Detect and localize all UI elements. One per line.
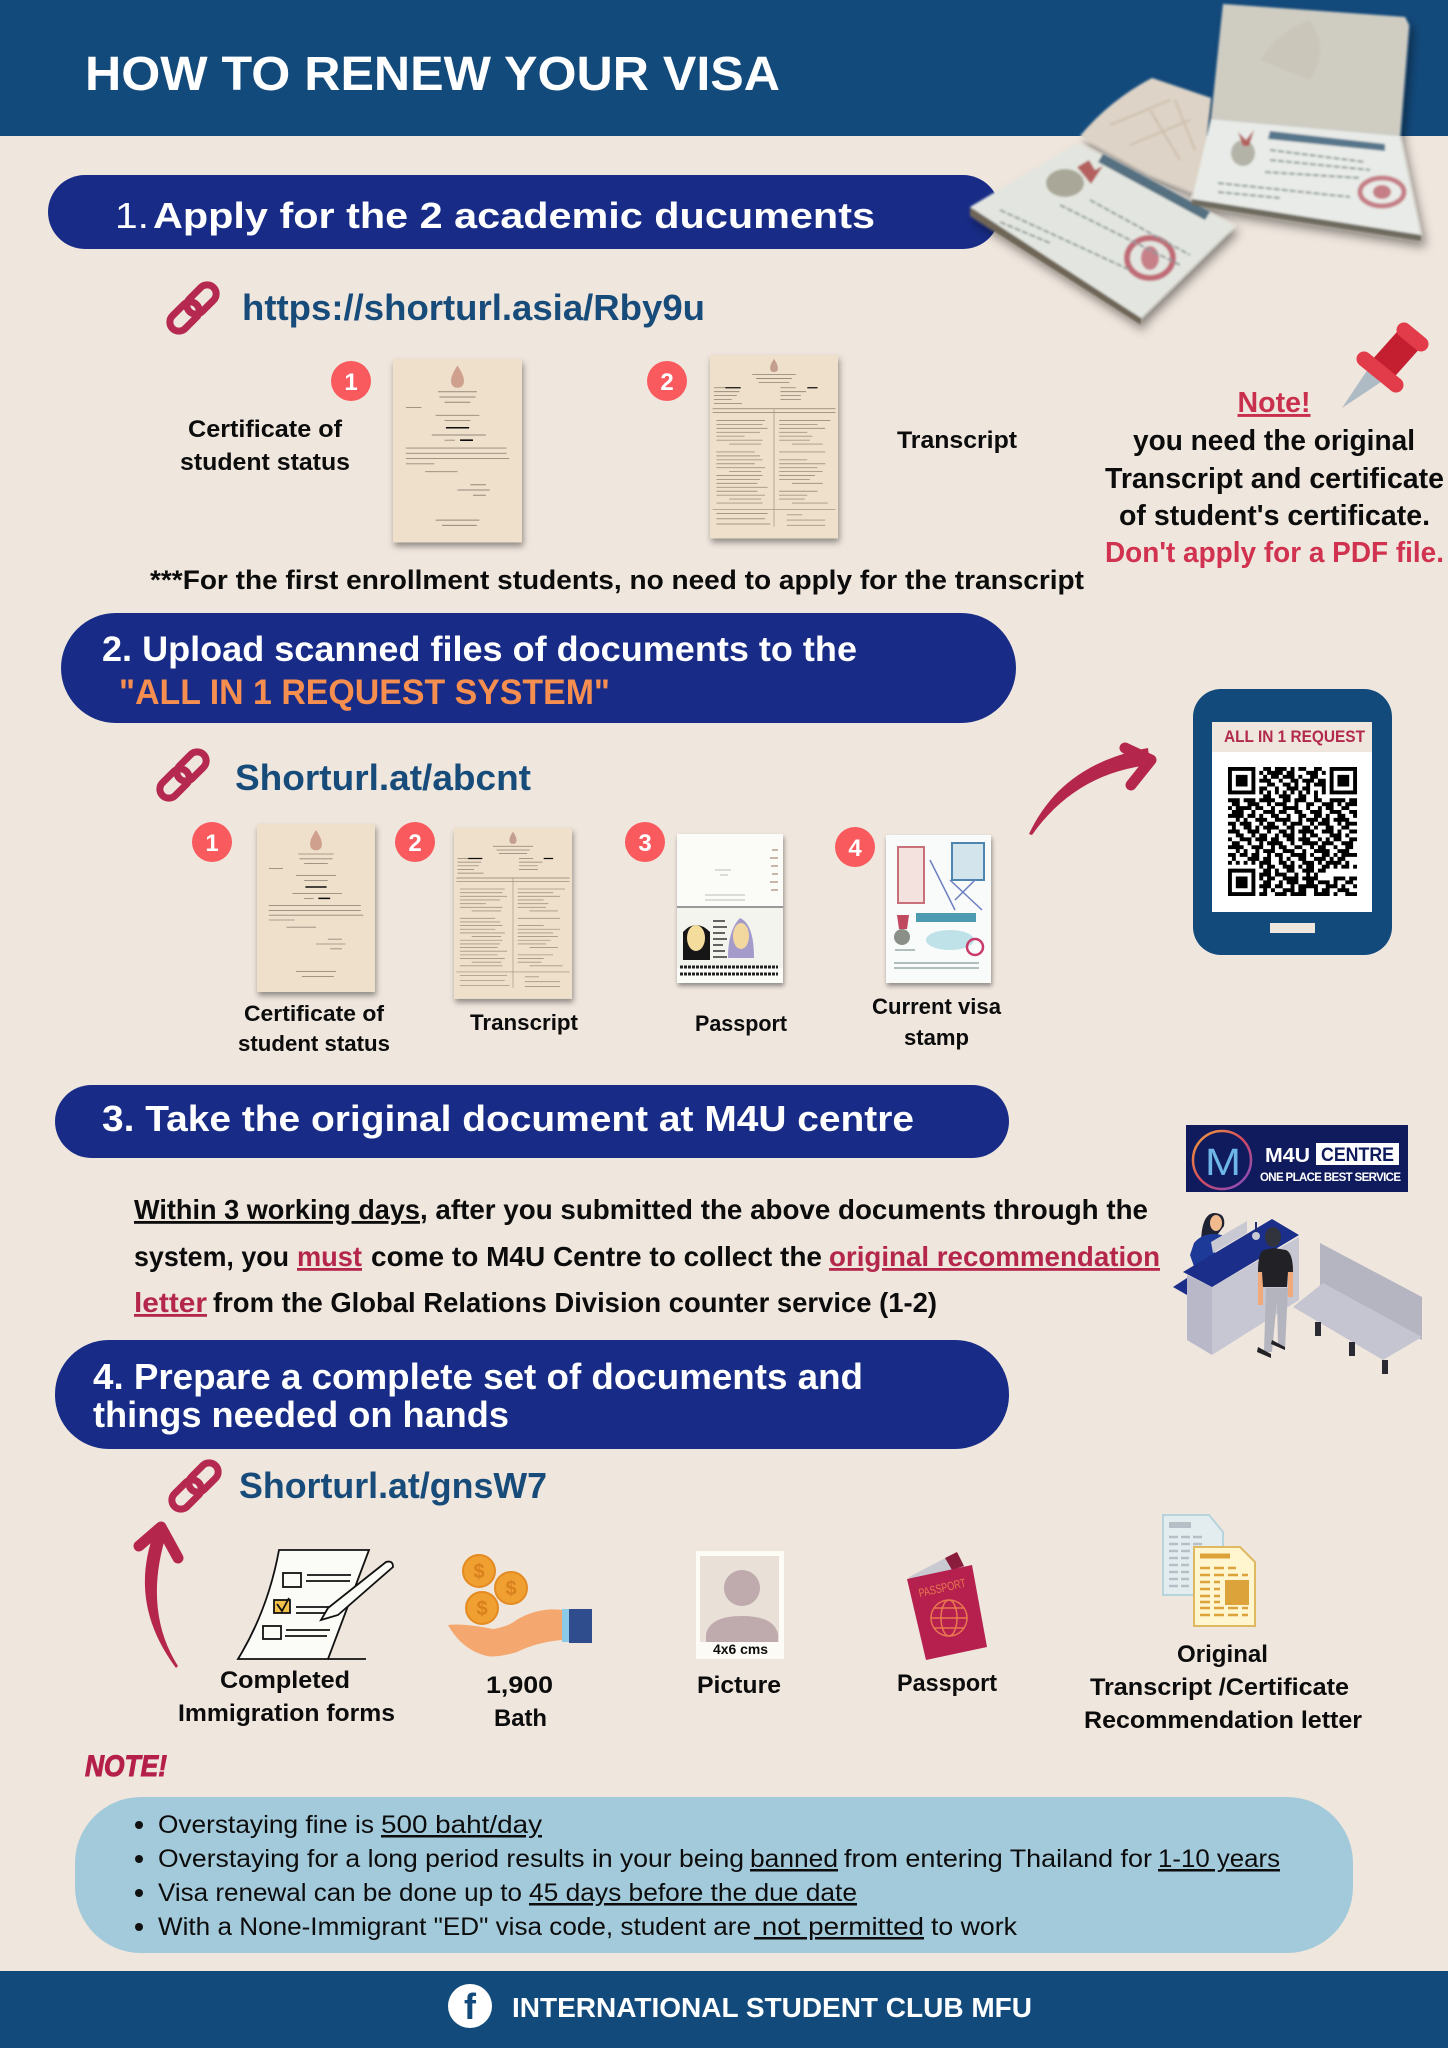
step 2 heading: 2. Upload scanned files of documents to the (102, 630, 857, 669)
illustration: service counter (1173, 1213, 1422, 1374)
icon: money in hand: $ (473, 1561, 485, 1583)
link 3 (168, 1459, 547, 1513)
receptionist (1190, 1213, 1224, 1275)
note callout: Note! (1238, 387, 1310, 419)
note callout (1105, 387, 1444, 569)
label: picture: Picture (697, 1672, 781, 1699)
step 4 heading (55, 1340, 1009, 1449)
QR code (1228, 767, 1357, 896)
footer (0, 1971, 1448, 2048)
badge 4 (835, 827, 875, 867)
badge 1: 1 (344, 369, 358, 396)
label: certificate of student status: student status (238, 1031, 390, 1056)
footer: INTERNATIONAL STUDENT CLUB MFU (512, 1992, 1032, 2023)
link 2: Shorturl.at/abcnt (235, 757, 531, 798)
step 3 paragraph: from the Global Relations Division counter service (1-2) (213, 1287, 937, 1318)
note callout: Transcript and certificate (1105, 463, 1444, 495)
label: current visa stamp: stamp (904, 1025, 969, 1050)
customer (1257, 1227, 1293, 1358)
bullet list: 45 days before the due date (529, 1879, 857, 1907)
M4U centre logo: M4U (1265, 1145, 1310, 1167)
note callout: you need the original (1133, 425, 1415, 457)
bullet list: from entering Thailand for (844, 1845, 1152, 1873)
step 3 paragraph: must (297, 1241, 362, 1272)
icon: chain link (156, 748, 210, 802)
bullet list: Overstaying for a long period results in your being (158, 1845, 744, 1873)
step 3 paragraph: system, you (134, 1241, 289, 1272)
label: certificate of student status (180, 416, 350, 476)
icon: documents (1163, 1515, 1255, 1626)
icon: money in hand: $ (476, 1598, 488, 1620)
label: original documents: Recommendation letter (1084, 1707, 1362, 1734)
note callout: of student's certificate. (1119, 500, 1430, 532)
document: certificate (257, 824, 375, 992)
badge 4: 4 (848, 835, 862, 862)
step 3 paragraph: come to M4U Centre to collect the (371, 1241, 822, 1272)
step 2 heading (61, 613, 1016, 723)
step 1 heading (48, 175, 1000, 249)
bullet list: 1-10 years (1158, 1845, 1280, 1873)
badge 2: 2 (660, 369, 674, 396)
title: HOW TO RENEW YOUR VISA (85, 48, 780, 101)
step 3 heading: 3. Take the original document at M4U centre (102, 1098, 914, 1139)
step 3 paragraph: letter (134, 1287, 207, 1318)
label: certificate of student status: student status (180, 449, 350, 476)
document: current visa stamp (886, 835, 991, 983)
label: passport: Passport (897, 1670, 997, 1697)
tablet with QR code: ALL IN 1 REQUEST (1224, 728, 1365, 746)
arrow to QR (1029, 748, 1151, 835)
badge 1 (331, 361, 371, 401)
M4U centre logo (1186, 1125, 1408, 1192)
bullet list: not permitted (754, 1913, 924, 1941)
photo: open passports (970, 4, 1421, 325)
label: original documents: Transcript /Certificate (1090, 1674, 1349, 1701)
M4U centre logo: CENTRE (1321, 1145, 1394, 1166)
badge 3 (625, 822, 665, 862)
badge 2 (647, 361, 687, 401)
badge 3: 3 (638, 830, 652, 857)
step 4 heading: 4. Prepare a complete set of documents and (93, 1356, 863, 1397)
label: 1,900 bath: Bath (494, 1705, 547, 1732)
label: 1,900 bath: 1,900 (486, 1672, 553, 1699)
label: certificate of student status: Certificate of (244, 1001, 385, 1026)
M4U centre logo: M (1205, 1142, 1241, 1184)
document: transcript (454, 828, 572, 999)
link 2 (156, 748, 531, 802)
icon: money in hand (448, 1555, 592, 1656)
bullet list: to work (931, 1913, 1018, 1941)
bench (1293, 1243, 1422, 1374)
step 1 heading: Apply for the 2 academic ducuments (153, 195, 875, 236)
step 3 paragraph: , after you submitted the above documents through the (420, 1194, 1148, 1225)
document: passport (677, 834, 783, 983)
label: certificate of student status (238, 1001, 390, 1056)
badge 1: 1 (205, 830, 219, 857)
label: 1,900 bath (486, 1672, 553, 1732)
badge 2: 2 (408, 830, 422, 857)
icon: immigration form (238, 1550, 393, 1659)
step 1 heading: 1. (115, 195, 149, 236)
step 2 heading: "ALL IN 1 REQUEST SYSTEM" (119, 673, 610, 712)
document: transcript (710, 355, 838, 538)
label: completed immigration forms: Completed (220, 1667, 350, 1694)
note heading: NOTE! (85, 1750, 167, 1783)
label: completed immigration forms: Immigration forms (178, 1700, 395, 1727)
note callout: Don't apply for a PDF file. (1105, 537, 1444, 569)
step 3 heading (55, 1085, 1009, 1158)
icon: chain link (168, 1459, 222, 1513)
link 1 (166, 281, 705, 335)
header band (0, 0, 1448, 136)
label: original documents: Original (1177, 1641, 1268, 1668)
label: current visa stamp: Current visa (872, 994, 1002, 1019)
link 3: Shorturl.at/gnsW7 (239, 1465, 547, 1506)
bullet list: Overstaying fine is (158, 1811, 374, 1839)
icon: money in hand: $ (505, 1578, 517, 1600)
bullet list: Visa renewal can be done up to (158, 1879, 522, 1907)
document: certificate (393, 359, 522, 542)
icon: chain link (166, 281, 220, 335)
bullet list: banned (750, 1845, 838, 1873)
label: certificate of student status: Certificate of (188, 416, 343, 443)
tablet with QR code (1193, 689, 1392, 955)
step 4 heading: things needed on hands (93, 1394, 509, 1435)
bullet list: 500 baht/day (381, 1811, 543, 1839)
icon: facebook (448, 1984, 492, 2028)
icon: 4x6 photo: 4x6 cms (713, 1641, 768, 1657)
first enrollment note: ***For the first enrollment students, no need to apply for the transcript (150, 565, 1084, 595)
note panel (75, 1797, 1353, 1953)
icon: passport: PASSPORT (917, 1576, 968, 1600)
label: completed immigration forms (178, 1667, 395, 1727)
label: transcript: Transcript (897, 427, 1017, 454)
label: original documents (1084, 1641, 1362, 1734)
icon: passport (907, 1552, 987, 1660)
step 3 paragraph: original recommendation (829, 1241, 1160, 1272)
label: current visa stamp (872, 994, 1002, 1050)
M4U centre logo: ONE PLACE BEST SERVICE (1260, 1172, 1401, 1184)
arrow up to link (139, 1527, 178, 1668)
bullet list (135, 1811, 1280, 1941)
badge 2 (395, 822, 435, 862)
label: passport: Passport (695, 1011, 788, 1036)
label: transcript: Transcript (470, 1010, 579, 1035)
link 1: https://shorturl.asia/Rby9u (242, 287, 705, 328)
icon: facebook: f (464, 1986, 477, 2027)
badge 1 (192, 822, 232, 862)
step 3 paragraph (134, 1194, 1160, 1318)
step 3 paragraph: Within 3 working days (134, 1194, 420, 1225)
icon: 4x6 photo (696, 1551, 784, 1659)
bullet list: With a None-Immigrant "ED" visa code, student are (158, 1913, 751, 1941)
icon: push pin (1342, 330, 1421, 408)
